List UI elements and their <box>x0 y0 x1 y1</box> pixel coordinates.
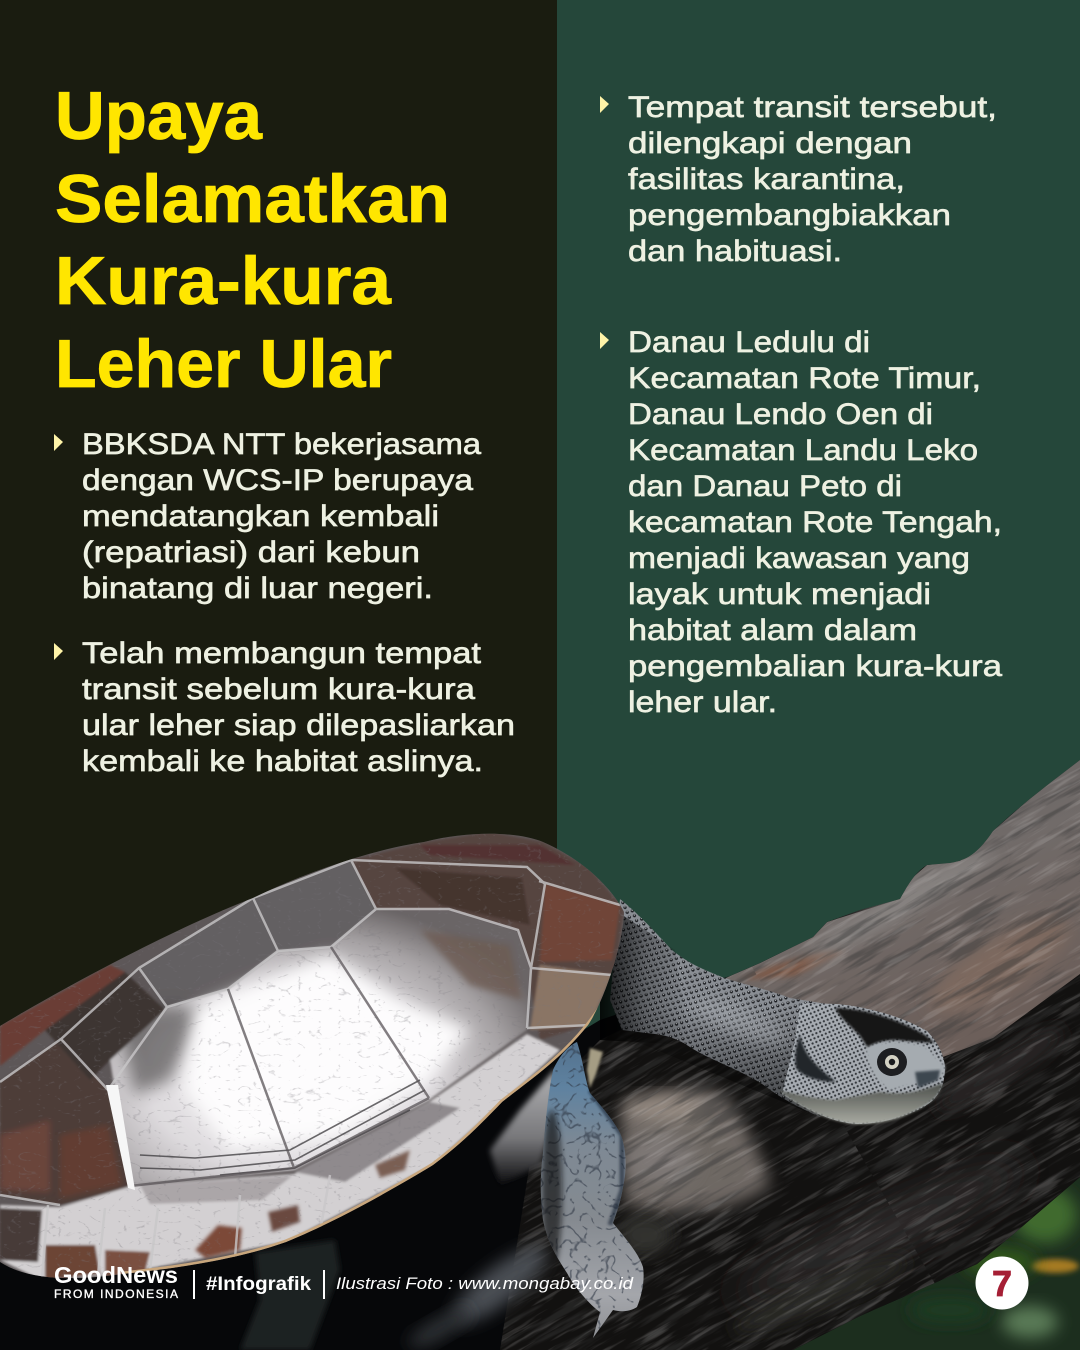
text block: leher ular. <box>628 686 777 719</box>
page number badge <box>976 1256 1028 1310</box>
bullet: kawasan danau <box>600 326 1002 719</box>
text block: transit sebelum kura-kura <box>82 673 475 706</box>
icon: bullet triangle <box>54 434 63 451</box>
page number badge: 7 <box>992 1263 1012 1304</box>
heading: Upaya <box>55 78 263 154</box>
icon: bullet triangle <box>54 643 63 660</box>
scute lines <box>0 860 620 1278</box>
growth rings <box>140 1080 425 1175</box>
text block: dilengkapi dengan <box>628 127 912 160</box>
head dark cap <box>835 1008 935 1048</box>
heading: Kura-kura <box>55 243 392 319</box>
footer strip <box>54 1262 634 1301</box>
shell rim <box>122 1006 598 1274</box>
text block: binatang di luar negeri. <box>82 572 433 605</box>
jaw <box>778 1083 943 1124</box>
grey rock lobe <box>620 1088 770 1213</box>
text block: Kecamatan Landu Leko <box>628 434 978 467</box>
text block: menjadi kawasan yang <box>628 542 970 575</box>
front leg <box>535 1040 647 1340</box>
lower pale marginal scutes <box>0 1034 560 1280</box>
logo: GoodNews from Indonesia: GoodNews <box>54 1262 178 1288</box>
text block: habitat alam dalam <box>628 614 917 647</box>
text block <box>628 326 1002 719</box>
photo credit: Ilustrasi Foto : www.mongabay.co.id <box>336 1274 634 1293</box>
text block <box>628 91 997 268</box>
dark left flank of silver <box>118 1005 205 1095</box>
text block: Danau Ledulu di <box>628 326 870 359</box>
text block: dengan WCS-IP berupaya <box>82 464 473 497</box>
bright highlight <box>185 955 470 1150</box>
text block: kecamatan Rote Tengah, <box>628 506 1002 539</box>
text block: Kecamatan Rote Timur, <box>628 362 981 395</box>
brown left scutes <box>0 1039 130 1205</box>
logo: GoodNews from Indonesia <box>54 1262 178 1301</box>
white wedge highlight <box>106 1085 135 1190</box>
panel: left dark background <box>0 0 557 1350</box>
text block: Telah membangun tempat <box>82 637 482 670</box>
heading: Selamatkan <box>55 161 450 237</box>
text block: dan Danau Peto di <box>628 470 902 503</box>
text block: mendatangkan kembali <box>82 500 439 533</box>
icon: bullet triangle <box>600 96 609 113</box>
text block: pengembangbiakkan <box>628 199 951 232</box>
neck <box>600 899 840 1117</box>
logo: GoodNews from Indonesia: FROM INDONESIA <box>54 1287 178 1301</box>
text block: Tempat transit tersebut, <box>628 91 997 124</box>
bullet: tempat transit <box>54 637 515 778</box>
text block: fasilitas karantina, <box>628 163 905 196</box>
text block: ular leher siap dilepasliarkan <box>82 709 515 742</box>
dark base under the animal <box>0 976 1080 1350</box>
rear leg <box>240 1240 340 1350</box>
head <box>778 1003 945 1124</box>
text block <box>82 637 515 778</box>
heading: Leher Ular <box>55 326 392 402</box>
panel: right green background <box>557 0 1080 1350</box>
lower left rock detail <box>404 1215 671 1350</box>
text block: BBKSDA NTT bekerjasama <box>82 428 481 461</box>
eye <box>877 1048 907 1076</box>
bullet: fasilitas <box>600 91 997 268</box>
text block: pengembalian kura-kura <box>628 650 1002 683</box>
hashtag: #Infografik <box>206 1274 311 1295</box>
mossy water corner <box>780 1170 1080 1350</box>
text block: layak untuk menjadi <box>628 578 931 611</box>
text block: Danau Lendo Oen di <box>628 398 933 431</box>
grey upper carapace band <box>139 860 376 1007</box>
snout <box>866 1042 945 1090</box>
photo: turtle on a log <box>0 750 1080 1350</box>
heading <box>55 78 450 402</box>
text block: (repatriasi) dari kebun <box>82 536 420 569</box>
text block <box>82 428 481 605</box>
text block: dan habituasi. <box>628 235 842 268</box>
bullet: BBKSDA NTT <box>54 428 481 605</box>
brown upper and right marginal scutes <box>351 832 624 1040</box>
underbody <box>490 1068 556 1185</box>
brown-grey patch, upper right of silver <box>420 930 522 1000</box>
shell <box>0 825 630 1285</box>
text block: kembali ke habitat aslinya. <box>82 745 483 778</box>
shell texture <box>0 825 630 1285</box>
log <box>500 750 1080 1350</box>
silver inner carapace <box>110 909 531 1185</box>
icon: bullet triangle <box>600 332 609 349</box>
